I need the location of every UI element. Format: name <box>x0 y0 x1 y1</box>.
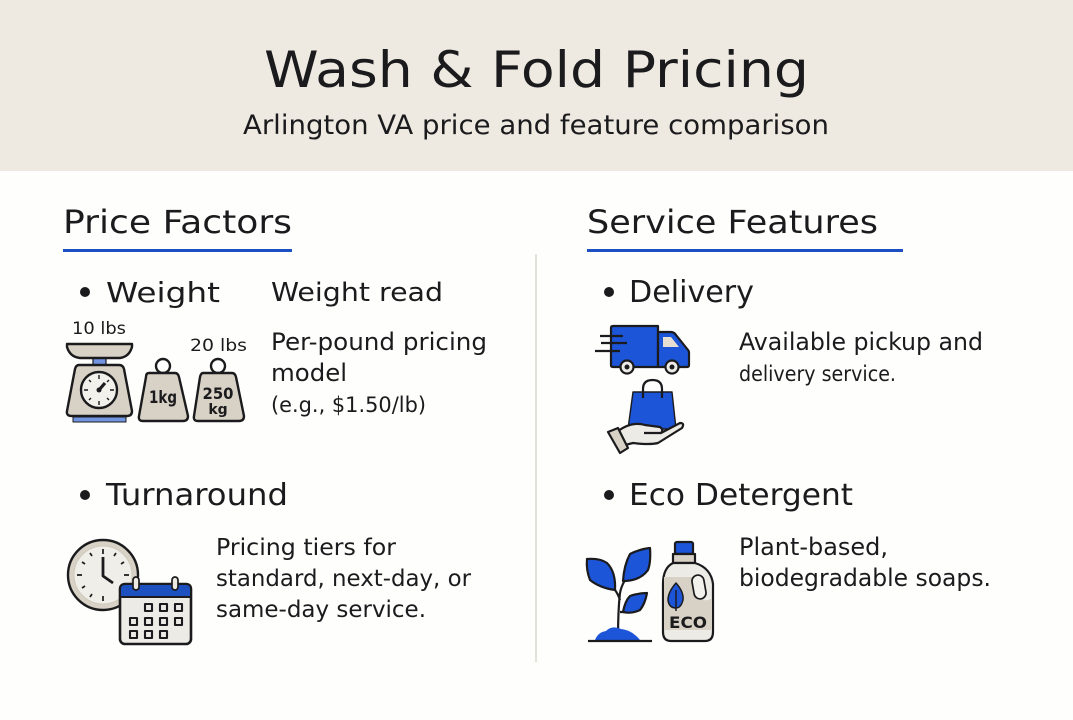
icon: scale and weights: kg <box>208 402 228 418</box>
icon: scale and weights: 10 lbs <box>72 319 126 339</box>
text: plant-based soaps <box>739 533 991 592</box>
panel: service features <box>587 203 991 641</box>
icon: scale and weights: 20 lbs <box>190 336 247 356</box>
bullet heading: Weight <box>80 276 220 309</box>
text: pickup and delivery <box>739 328 983 387</box>
text: pricing tiers: same-day service. <box>216 597 426 623</box>
heading: Price Factors: Price Factors <box>63 203 292 241</box>
bullet heading: Turnaround: Turnaround <box>105 478 288 513</box>
title: Wash & Fold Pricing <box>264 41 809 99</box>
icon: eco detergent bottle: ECO <box>669 613 707 632</box>
bullet heading: Weight: Weight <box>106 276 220 309</box>
subtitle: Arlington VA price and feature comparison <box>243 110 829 141</box>
text: per-pound pricing <box>271 328 487 418</box>
bullet heading: Delivery: Delivery <box>629 275 754 310</box>
icon: shopping bag on hand <box>608 380 683 453</box>
text: per-pound pricing: model <box>271 359 347 387</box>
icon: clock and calendar <box>68 540 191 644</box>
heading: Price Factors <box>63 203 292 252</box>
icon: scale and weights <box>67 319 247 422</box>
text: Weight read: Weight read <box>271 278 443 308</box>
text: per-pound pricing: Per-pound pricing <box>271 328 487 356</box>
bullet heading: Eco Detergent: Eco Detergent <box>629 478 853 513</box>
panel: price factors <box>63 203 487 644</box>
icon: delivery truck <box>595 326 689 374</box>
header band <box>0 0 1073 171</box>
icon: plant <box>587 548 652 641</box>
text: pickup and delivery: Available pickup and <box>739 328 983 356</box>
text: plant-based soaps: biodegradable soaps. <box>739 564 991 592</box>
icon: scale and weights: 250 <box>202 384 234 403</box>
column divider <box>535 254 537 662</box>
icon: scale and weights: 1kg <box>149 388 177 408</box>
heading: Service Features: Service Features <box>587 203 878 241</box>
text: pricing tiers: Pricing tiers for <box>216 535 397 561</box>
text: pricing tiers <box>216 535 472 623</box>
heading: Service Features <box>587 203 903 252</box>
text: pricing tiers: standard, next-day, or <box>216 566 472 592</box>
icon: eco detergent bottle <box>663 542 713 641</box>
text: per-pound pricing: (e.g., $1.50/lb) <box>271 393 426 418</box>
text: pickup and delivery: delivery service. <box>739 362 896 387</box>
text: plant-based soaps: Plant-based, <box>739 533 888 561</box>
